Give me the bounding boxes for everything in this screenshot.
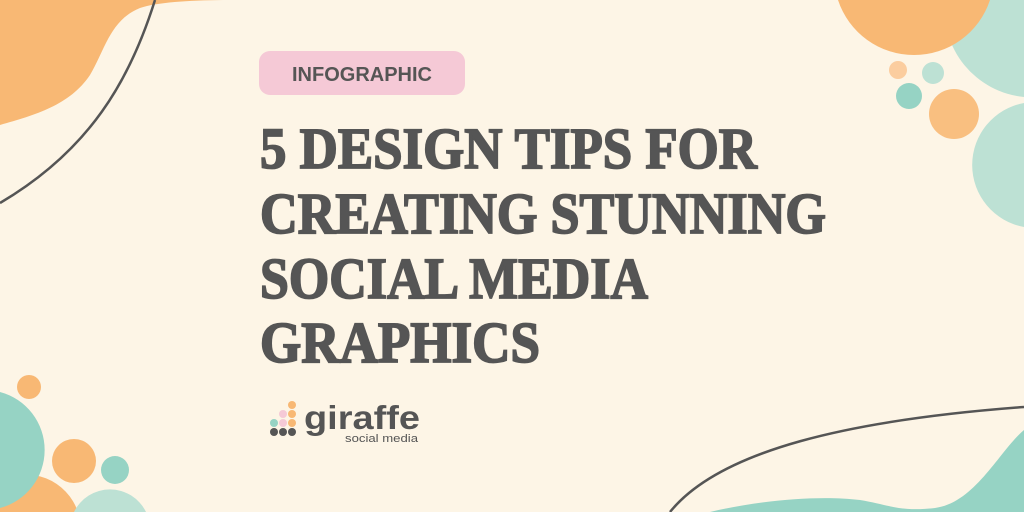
decoration: bottom-right wave: [670, 407, 1024, 512]
title: GRAPHICS: [260, 310, 540, 375]
title: CREATING STUNNING: [260, 181, 826, 246]
logo: giraffe social media: giraffe: [304, 399, 420, 436]
tag: infographic pill: INFOGRAPHIC: [292, 64, 432, 86]
decoration: top-left blob: [0, 0, 310, 203]
decoration: bottom-left circles: [0, 375, 146, 512]
tag: infographic pill: [259, 51, 465, 95]
title: [260, 116, 826, 375]
title: SOCIAL MEDIA: [260, 246, 648, 311]
title: 5 DESIGN TIPS FOR: [260, 116, 758, 181]
decoration: top-right circles: [838, 0, 1024, 227]
logo: giraffe social media: [270, 399, 420, 445]
logo: giraffe social media: social media: [345, 433, 419, 445]
